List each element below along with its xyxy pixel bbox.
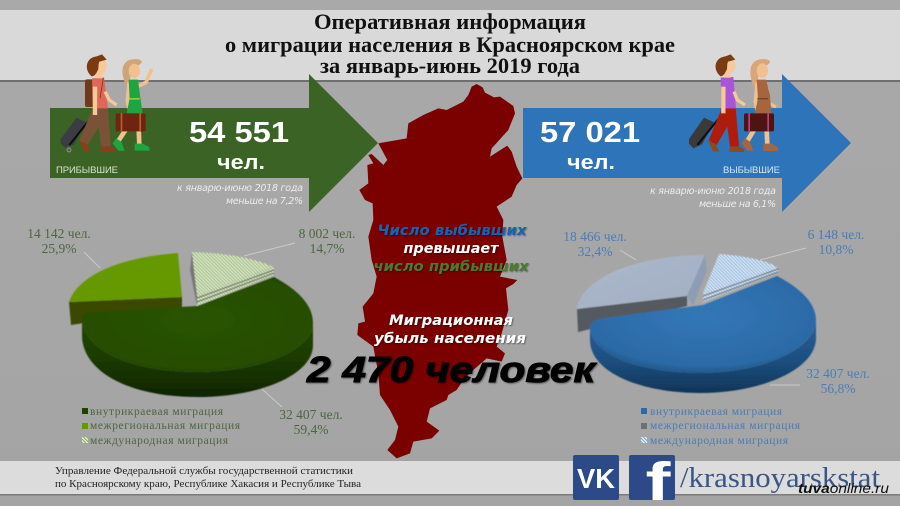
- comparison note: arrivals: [177, 183, 303, 207]
- comparison note: arrivals: меньше на 7,2%: [226, 196, 303, 207]
- legend: departures: межрегиональная миграция: [650, 420, 801, 432]
- pie labels: arrivals: 8 002 чел.: [299, 226, 355, 241]
- legend: arrivals: [82, 406, 241, 447]
- arrow: departures: [523, 74, 851, 212]
- comparison note: departures: [650, 186, 776, 210]
- comparison note: departures: к январю-июню 2018 года: [650, 186, 776, 197]
- legend: arrivals: межрегиональная миграция: [90, 420, 241, 432]
- leader lines: [84, 243, 806, 407]
- pie labels: arrivals: 14,7%: [310, 241, 344, 256]
- footer text: Управление Федеральной службы государственной статистики: [55, 466, 353, 477]
- title: за январь-июнь 2019 года: [320, 53, 580, 78]
- callout: migration loss: [374, 313, 526, 347]
- arrivals figure: [189, 117, 289, 174]
- icon: VK: VK: [577, 463, 615, 494]
- callout: migration loss: Миграционная: [389, 313, 513, 329]
- woman: [122, 59, 142, 87]
- people: arrivals: [61, 54, 152, 152]
- footer band: [0, 461, 900, 496]
- title: Оперативная информация: [314, 9, 586, 34]
- comparison note: arrivals: к январю-июню 2018 года: [177, 183, 303, 194]
- pie labels: departures: 56,8%: [821, 381, 855, 396]
- pie labels: arrivals: 59,4%: [294, 422, 328, 437]
- icon: VK: [573, 455, 619, 500]
- footer text: [55, 466, 361, 490]
- social handle: /krasnoyarskstat: [680, 462, 880, 494]
- legend: departures: международная миграция: [650, 435, 789, 447]
- pie labels: arrivals: 25,9%: [42, 241, 76, 256]
- legend: arrivals: международная миграция: [90, 435, 229, 447]
- departures figure: чел.: [567, 152, 615, 174]
- luggage: [689, 113, 723, 148]
- callout: departures exceed arrivals: Число выбывших: [378, 223, 528, 239]
- departures figure: 57 021: [540, 117, 640, 149]
- pie labels: departures: 18 466 чел.: [563, 229, 627, 244]
- pie labels: departures: 32 407 чел.: [806, 366, 870, 381]
- pie labels: departures: 6 148 чел.: [808, 227, 864, 242]
- luggage: [61, 113, 95, 152]
- legend: departures: [641, 406, 801, 447]
- map: Krasnoyarsk Krai: [357, 84, 522, 458]
- legend: arrivals: внутрикраевая миграция: [90, 406, 224, 418]
- callout: departures exceed arrivals: превышает: [404, 241, 499, 257]
- watermark: tuvaonline.ru: [798, 480, 889, 496]
- callout: migration loss: убыль населения: [374, 331, 526, 347]
- title: [225, 9, 675, 78]
- legend: departures: внутрикраевая миграция: [650, 406, 783, 418]
- title: о миграции населения в Красноярском крае: [225, 32, 675, 57]
- pie chart: departures: [577, 254, 816, 393]
- pie chart: arrivals: [69, 252, 313, 397]
- arrow: arrivals: [50, 74, 378, 212]
- arrivals figure: чел.: [217, 152, 265, 174]
- people: departures: [689, 54, 778, 152]
- comparison note: departures: меньше на 6,1%: [699, 199, 776, 210]
- callout: departures exceed arrivals: число прибывших: [374, 259, 530, 275]
- pie labels: arrivals: 14 142 чел.: [27, 226, 91, 241]
- pie labels: departures: 10,8%: [819, 242, 853, 257]
- pie labels: arrivals: 32 407 чел.: [279, 407, 343, 422]
- callout: departures exceed arrivals: [374, 223, 530, 275]
- pie labels: arrivals: [27, 226, 355, 437]
- label: departures: ВЫБЫВШИЕ: [723, 165, 780, 176]
- footer text: по Красноярскому краю, Республике Хакасия и Республике Тыва: [55, 479, 361, 490]
- woman: [750, 59, 770, 88]
- pie labels: departures: 32,4%: [578, 244, 612, 259]
- big number: 2 470 people: 2 470 человек: [306, 349, 597, 390]
- header band: [0, 10, 900, 82]
- pie labels: departures: [563, 227, 870, 396]
- icon: Facebook: [629, 452, 675, 506]
- arrivals figure: 54 551: [189, 117, 289, 149]
- departures figure: [540, 117, 640, 174]
- label: arrivals: ПРИБЫВШИЕ: [56, 165, 118, 176]
